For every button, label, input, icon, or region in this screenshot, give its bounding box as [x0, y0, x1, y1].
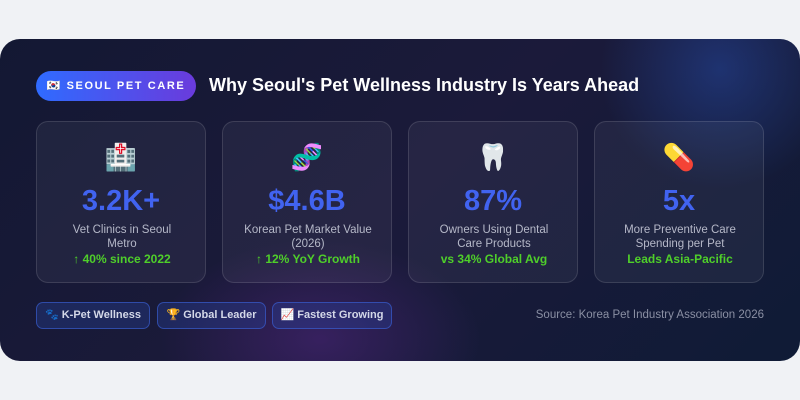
card: dental: Care Products — [457, 238, 531, 250]
tag: global — [157, 302, 266, 329]
tag: fastest — [272, 302, 392, 329]
card: market value: Korean Pet Market Value — [244, 224, 372, 236]
source: Source: Korea Pet Industry Association 2026 — [536, 309, 764, 321]
card: preventive: 💊 — [663, 142, 695, 172]
card: market value: (2026) — [291, 238, 325, 250]
card: preventive: 5x — [663, 185, 695, 217]
card: vet clinics: Vet Clinics in Seoul — [73, 224, 171, 236]
card: market value — [222, 121, 392, 283]
card: vet clinics — [36, 121, 206, 283]
badge: 🇰🇷 SEOUL PET CARE — [47, 80, 185, 92]
badge — [36, 71, 196, 101]
card: vet clinics: 3.2K+ — [82, 185, 160, 217]
card: market value: 🧬 — [291, 142, 323, 172]
card: vet clinics: Metro — [107, 238, 137, 250]
tag: global: 🏆 Global Leader — [166, 309, 257, 321]
card: preventive — [594, 121, 764, 283]
tag: fastest: 📈 Fastest Growing — [281, 309, 383, 321]
card: vet clinics: ↑ 40% since 2022 — [73, 252, 171, 266]
card: market value: $4.6B — [268, 185, 346, 217]
title: Why Seoul's Pet Wellness Industry Is Years Ahead — [209, 75, 639, 95]
card: vet clinics: 🏥 — [105, 142, 137, 172]
card: dental: Owners Using Dental — [440, 224, 548, 236]
card: market value: ↑ 12% YoY Growth — [256, 252, 360, 266]
tag: k-pet: 🐾 K-Pet Wellness — [45, 309, 141, 321]
card: preventive: Leads Asia-Pacific — [627, 252, 733, 266]
card: preventive: More Preventive Care — [624, 224, 736, 236]
card: dental — [408, 121, 578, 283]
card: dental: 🦷 — [477, 142, 509, 172]
tag: k-pet — [36, 302, 150, 329]
card: dental: vs 34% Global Avg — [441, 252, 547, 266]
card: dental: 87% — [464, 185, 522, 217]
card: preventive: Spending per Pet — [636, 238, 724, 250]
